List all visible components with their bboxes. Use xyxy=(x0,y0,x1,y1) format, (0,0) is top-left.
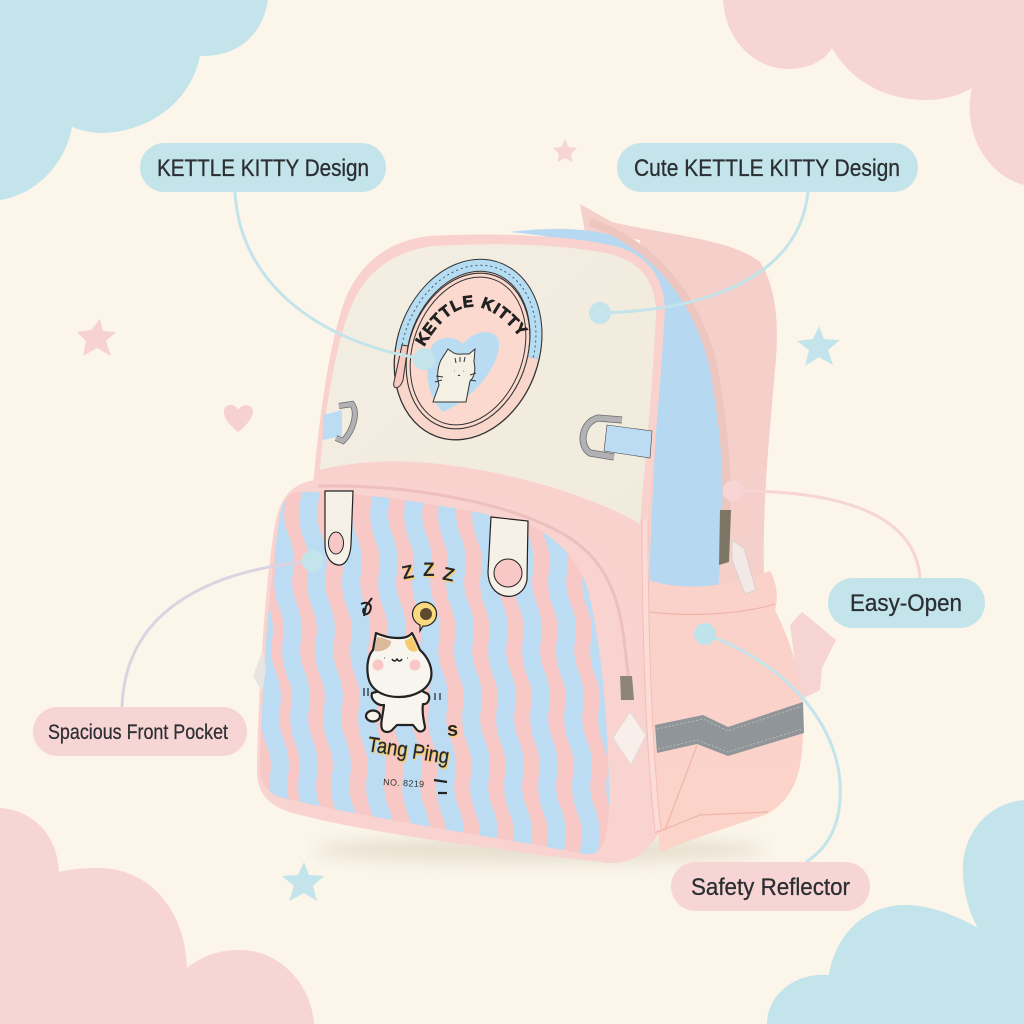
cream upper panel xyxy=(320,244,656,524)
cheek left xyxy=(372,660,384,670)
kettle badge xyxy=(393,258,542,440)
wavy blue stripes xyxy=(262,492,610,854)
cat face and whiskers xyxy=(435,357,476,382)
leader: Cute KETTLE KITTY Design xyxy=(589,192,808,324)
label: Spacious Front Pocket: Spacious Front Pocket xyxy=(48,721,228,744)
Z Z Z text: Z xyxy=(441,564,457,587)
motion ticks xyxy=(364,688,440,700)
star: blue bottom xyxy=(282,862,324,901)
equals mark xyxy=(434,780,447,793)
zipper pull: front pocket xyxy=(613,676,646,765)
label: Cute KETTLE KITTY Design: Cute KETTLE KITTY Design xyxy=(634,155,900,182)
badge blue band xyxy=(401,265,536,358)
badge outer xyxy=(370,239,566,461)
leader: Spacious Front Pocket xyxy=(122,550,324,707)
badge title: KETTLE KITTY xyxy=(414,295,529,346)
cheek right xyxy=(410,660,420,670)
label: Easy-Open: Easy-Open xyxy=(850,590,962,617)
Z Z Z text: Z xyxy=(423,560,435,581)
small squiggle icon xyxy=(361,598,372,616)
number text: NO. 8219 xyxy=(383,777,424,789)
badge heart xyxy=(427,332,499,412)
label: Safety Reflector: Safety Reflector xyxy=(691,874,850,901)
left D-ring and strap xyxy=(323,404,355,441)
front panel piping and lower band xyxy=(300,234,665,863)
speech bubble icon xyxy=(412,602,437,631)
face xyxy=(384,658,408,661)
label: Cute KETTLE KITTY Design xyxy=(617,143,918,192)
tail xyxy=(366,710,380,722)
cloud: bottom right xyxy=(767,800,1024,1024)
badge cat xyxy=(433,349,476,402)
leader: KETTLE KITTY Design xyxy=(235,192,435,370)
head patch yellow xyxy=(405,636,418,652)
label: KETTLE KITTY Design: KETTLE KITTY Design xyxy=(157,155,369,182)
piping highlight xyxy=(645,520,658,830)
leader: Easy-Open xyxy=(722,480,920,578)
star: small pink top xyxy=(553,139,577,162)
leader: Safety Reflector xyxy=(694,623,840,862)
right D-ring and strap xyxy=(583,418,652,458)
wavy striped print xyxy=(260,492,610,854)
cloud: top right xyxy=(723,0,1024,185)
label: Safety Reflector xyxy=(671,862,870,911)
badge pull tab xyxy=(394,345,408,388)
cloud: bottom left xyxy=(0,808,314,1024)
badge inner ring xyxy=(390,261,546,441)
cloud: top left xyxy=(0,0,268,200)
backpack xyxy=(253,204,836,863)
zipper pull: main xyxy=(719,510,756,594)
side pocket seams xyxy=(650,604,775,833)
safety reflector strip xyxy=(655,702,804,756)
icon: heart xyxy=(224,405,253,432)
star: pink left xyxy=(77,319,116,356)
reflector stitching xyxy=(657,706,802,752)
blue side panel xyxy=(510,229,723,595)
ground shadow xyxy=(315,838,765,862)
head patch brown xyxy=(374,637,391,651)
side pocket xyxy=(648,571,803,852)
badge zipper band outline xyxy=(401,265,536,358)
front pocket gusset xyxy=(257,480,655,863)
bag back panel xyxy=(580,204,777,595)
Z Z Z text xyxy=(400,560,457,587)
label: KETTLE KITTY Design xyxy=(140,143,386,192)
print base xyxy=(260,492,609,853)
body xyxy=(372,690,429,732)
front pocket zipper line xyxy=(318,486,630,690)
badge ring xyxy=(385,256,551,446)
badge band stitching xyxy=(401,265,536,358)
star: blue right xyxy=(797,326,840,366)
label: Spacious Front Pocket xyxy=(33,707,247,756)
Tang Ping text: Tang Ping xyxy=(366,733,451,769)
kitty character xyxy=(364,633,440,732)
main zipper xyxy=(590,222,726,515)
s mark: s xyxy=(447,719,458,741)
Z Z Z text: Z xyxy=(400,561,416,584)
label: Easy-Open xyxy=(828,578,985,628)
piping between front and side xyxy=(645,520,658,830)
tab: left xyxy=(325,491,353,565)
head xyxy=(367,633,431,697)
crystal pull: left edge xyxy=(253,650,266,692)
side water bottle strap xyxy=(790,612,836,700)
tab: right xyxy=(488,517,528,596)
